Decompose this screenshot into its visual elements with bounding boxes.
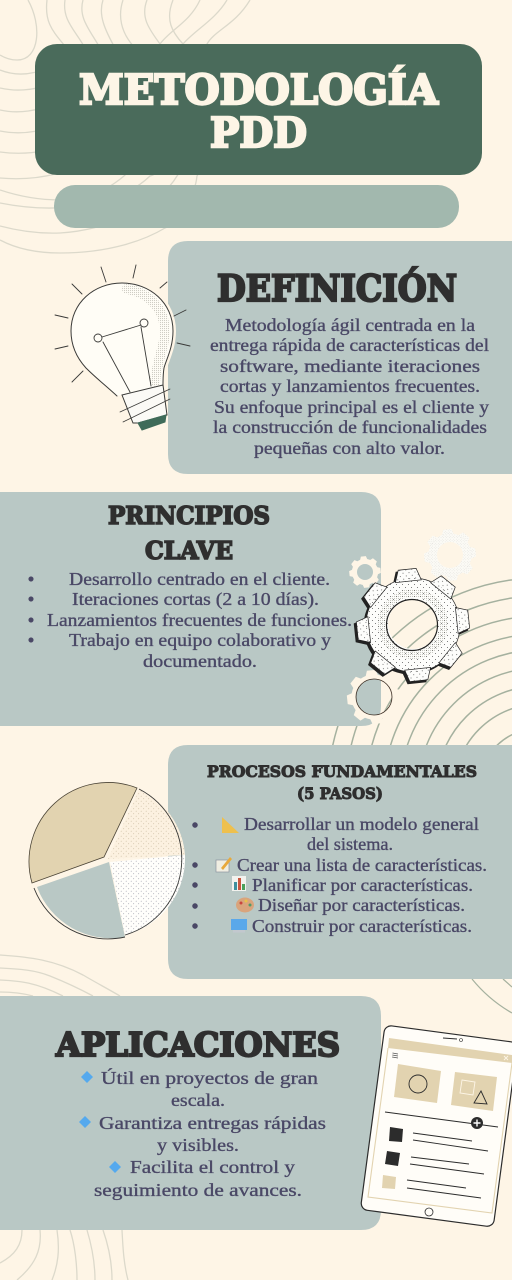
list: principios clave: Desarrollo centrado en el cliente.: [69, 569, 330, 589]
text: definición: cortas y lanzamientos frecuentes.: [220, 376, 480, 396]
gear: small left: [349, 556, 381, 588]
list: procesos: del sistema.: [307, 834, 393, 854]
list: procesos: Crear una lista de características.: [237, 855, 487, 875]
panel: procesos fundamentales: [168, 745, 512, 979]
panel: principios clave: [0, 492, 381, 726]
list: principios clave: documentado.: [143, 651, 257, 671]
gear: top: [424, 529, 476, 581]
list: aplicaciones: seguimiento de avances.: [94, 1180, 302, 1200]
text: definición: entrega rápida de características del: [210, 335, 489, 355]
icon: bar chart: [232, 876, 246, 891]
heading: principios clave: [108, 501, 270, 565]
list: procesos: Desarrollar un modelo general: [244, 814, 479, 834]
icon: light bulb: [55, 265, 190, 430]
text: definición: Metodología ágil centrada en la: [225, 315, 475, 335]
list: procesos: Planificar por características.: [252, 875, 473, 895]
text: definición: pequeñas con alto valor.: [254, 438, 445, 458]
list: aplicaciones: Útil en proyectos de gran: [101, 1067, 318, 1088]
heading: procesos fundamentales: [207, 762, 477, 803]
title: METODOLOGÍA: [79, 65, 439, 114]
text: definición: la construcción de funcionalidades: [213, 417, 487, 437]
icon: palette: [236, 898, 254, 912]
list: principios clave: Iteraciones cortas (2 a 10 días).: [72, 589, 319, 610]
list: procesos: Diseñar por características.: [258, 895, 465, 915]
icon: triangular ruler: [222, 817, 239, 833]
title panel: [35, 44, 482, 175]
contour lines: concentric arcs behind gears: [332, 579, 512, 745]
text: definición: software, mediante iteraciones: [220, 356, 480, 376]
pie outline: [34, 789, 182, 939]
icon: memo: [216, 857, 232, 872]
list: principios clave: [29, 569, 352, 671]
heading: aplicaciones: APLICACIONES: [55, 1025, 340, 1064]
heading: principios clave: CLAVE: [145, 536, 233, 565]
gear: main: [354, 568, 470, 684]
heading: definición: DEFINICIÓN: [217, 268, 457, 310]
chart: pie: [29, 782, 185, 939]
slice: white dotted: [110, 855, 185, 935]
slice: tan: [29, 782, 137, 883]
icon: computer: [231, 919, 247, 932]
slice: blue grey: [37, 862, 125, 938]
title: [79, 65, 439, 157]
heading: principios clave: PRINCIPIOS: [108, 501, 270, 530]
icon: tablet: [360, 1025, 512, 1227]
list: procesos: Construir por características.: [252, 916, 472, 936]
list: aplicaciones: Garantiza entregas rápidas: [99, 1113, 326, 1133]
contour lines: lower left and right: [0, 955, 512, 1280]
list: aplicaciones: escala.: [171, 1090, 225, 1110]
icon: gears: [347, 529, 476, 724]
panel: aplicaciones: [0, 996, 381, 1230]
contour lines: top left: [0, 0, 250, 253]
heading: procesos fundamentales: (5 PASOS): [297, 784, 383, 803]
text: definición: [210, 315, 489, 458]
subtitle pill: [54, 185, 459, 228]
list: aplicaciones: y visibles.: [157, 1135, 239, 1155]
title: PDD: [210, 109, 307, 157]
list: principios clave: Lanzamientos frecuentes de funciones.: [47, 610, 352, 630]
list: procesos: [192, 814, 487, 936]
gear: bottom: [347, 670, 401, 724]
heading: procesos fundamentales: PROCESOS FUNDAMENTALES: [207, 762, 477, 781]
slice: dotted cream: [108, 789, 185, 859]
text: definición: Su enfoque principal es el cliente y: [214, 397, 489, 417]
panel: definición: [168, 241, 512, 474]
list: aplicaciones: [79, 1067, 326, 1200]
list: aplicaciones: Facilita el control y: [130, 1157, 295, 1177]
list: principios clave: Trabajo en equipo colaborativo y: [69, 630, 331, 650]
